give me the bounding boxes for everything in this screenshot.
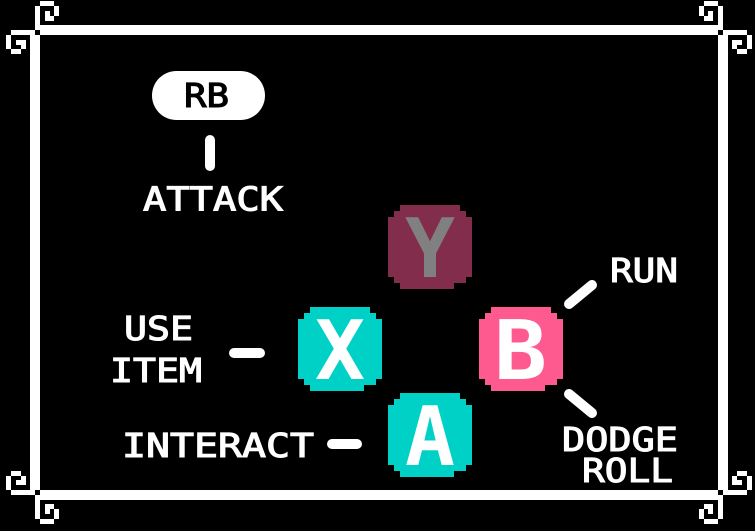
connector: interact to A xyxy=(332,439,357,449)
button A: A xyxy=(405,390,455,485)
corner spirals: bottom left xyxy=(6,471,59,524)
RB bumper button xyxy=(152,71,265,120)
RB bumper button: RB xyxy=(184,76,229,115)
connector: use item to X xyxy=(234,348,260,358)
button Y xyxy=(388,202,472,297)
label: dodge roll: ROLL xyxy=(582,451,673,490)
button B: B xyxy=(494,304,547,399)
corner spirals: bottom right xyxy=(699,471,752,524)
corner spirals: top left xyxy=(6,1,59,54)
label: attack: ATTACK xyxy=(143,180,283,218)
label: run: RUN xyxy=(610,251,678,290)
connector: B to run xyxy=(569,285,592,304)
label: dodge roll: DODGE xyxy=(562,420,678,459)
label: use item: ITEM xyxy=(110,351,202,390)
button X: X xyxy=(315,304,365,399)
label: use item xyxy=(110,309,202,390)
corner spirals: top right xyxy=(699,1,752,54)
connector: B to dodge roll xyxy=(569,394,592,413)
button A xyxy=(388,390,472,485)
label: interact: INTERACT xyxy=(122,426,314,465)
label: use item: USE xyxy=(124,309,193,348)
button B xyxy=(479,304,563,399)
button X xyxy=(298,304,382,399)
label: dodge roll xyxy=(562,420,678,490)
connector: RB to attack xyxy=(205,140,215,166)
button Y: Y xyxy=(405,202,456,297)
